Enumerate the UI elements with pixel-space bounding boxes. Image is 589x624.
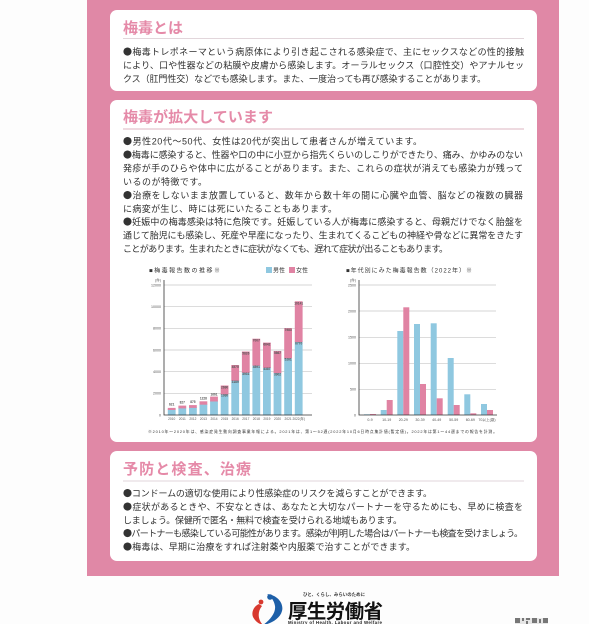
text block: spreading details: 発疹が手のひらや体中に広がることがあります。また、これらの症状が消えても感染力が残って [123,162,523,174]
x axis labels: 2018 [253,417,260,421]
text block: definition: により、口や性器などの粘膜や皮膚から感染します。オーラルセックス（口腔性交）やアナルセッ [123,60,524,70]
icon: QR code [515,618,548,624]
axes [164,280,312,415]
y axis labels: 2000 [153,392,161,396]
y axis labels: 2500 [348,283,356,287]
value labels: 875 [190,400,196,404]
legend: male and female: 女性 [296,266,308,274]
pink background panel [87,0,559,576]
text block: spreading details: ことがあります。生まれたときに症状がなくても、遅れて症状が出ることもあります。 [123,243,448,254]
x axis labels: 2017 [242,417,250,421]
heading: prevention, testing and treatment: 予防と検査、治療 [123,460,251,478]
chart title: by age: ■年代別にみた梅毒報告数（2022年）※ [346,266,472,274]
chart title: trend: ■梅毒報告数の推移※ [149,266,220,274]
logo: Ministry of Health, Labour and Welfare [252,591,383,624]
y axis labels: 8000 [153,327,161,331]
value labels: 4591 [253,365,260,369]
text block: spreading details: に病変が生じ、時には死にいたることもあります。 [123,203,337,214]
y axis labels: 10000 [151,305,161,309]
x axis labels: 2020 [274,417,281,421]
value labels: 6770 [295,341,302,345]
x axis labels: 30-39 [415,418,425,422]
text block: prevention advice: ●コンドームの適切な使用により性感染症のリスクを減らすことができます。 [123,486,432,500]
value labels: 4387 [263,367,271,371]
y axis labels: 1000 [348,362,356,366]
text block: prevention advice: ●パートナーも感染している可能性があります。感染が判明した場合はパートナーも検査を受けましょう。 [123,526,523,540]
x axis labels: 2021 [285,417,292,421]
heading: what is syphilis: 梅毒とは [123,19,183,37]
x axis labels: 2014 [210,417,218,421]
x axis labels: 60-69 [466,418,475,422]
value labels: 3931 [242,372,250,376]
text block: definition: ●梅毒トレポネーマという病原体により引き起こされる感染症で、主にセックスなどの性的接触 [123,45,524,58]
text block: spreading details [123,134,523,254]
male bars [364,323,487,415]
y axis labels: 6000 [153,348,161,352]
icon: ministry emblem [252,594,282,624]
value labels: 4575 [232,365,239,369]
x axis labels: 2015 [221,417,228,421]
value labels: 5867 [274,351,281,355]
text block: definition: クス（肛門性交）などでも感染します。また、一度治っても再び感染することがあります。 [123,73,486,84]
text block: prevention advice: ●梅毒は、早期に治療をすれば注射薬や内服薬で治すことができます。 [123,540,415,553]
text block: spreading details: ●男性20代～50代、女性は20代が突出して患者さんが増えています。 [123,134,422,148]
value labels: 7007 [253,339,260,343]
text block: spreading details: ●梅毒に感染すると、性器や口の中に小豆から指先くらいのしこりができたり、痛み、かゆみのない [123,148,523,161]
value labels: 2690 [221,386,228,390]
panel: syphilis is spreading [110,100,537,442]
bar chart: reported cases by year [149,266,312,421]
y axis labels: 1500 [348,336,356,340]
axes [359,280,497,415]
x axis labels: 2016 [232,417,239,421]
y axis labels: (件) [350,278,356,282]
female bars [168,302,302,410]
value labels: 6642 [263,343,271,347]
text block: prevention advice: しましょう。保健所で匿名・無料で検査を受けられる地域もあります。 [123,514,402,526]
value labels: 827 [180,400,185,404]
value labels: 1228 [200,396,207,400]
value labels: 621 [169,402,175,406]
x axis labels: 40-49 [432,418,441,422]
panel: what is syphilis [110,10,537,91]
y axis labels: 0 [159,413,161,417]
text block: spreading details: 通じて胎児にも感染し、死産や早産になったり、生まれてくるこどもの神経や骨などに異常をきたす [123,230,523,240]
x axis labels: 2019 [263,417,271,421]
text block: prevention advice: ●症状があるときや、不安なときは、あなたと大切なパートナーを守るためにも、早めに検査を [123,500,523,513]
y axis labels: 4000 [153,370,161,374]
y axis labels: (件) [155,278,161,282]
legend: male and female [266,266,308,274]
x axis labels [168,416,305,421]
x axis labels [367,417,496,422]
value labels: 5261 [285,358,292,362]
text block: definition [123,45,524,84]
x axis labels: 50-59 [449,418,458,422]
x axis labels: 2010 [168,417,175,421]
value labels: 3902 [274,372,281,376]
y axis labels: 2000 [348,309,356,313]
value labels: 5826 [242,352,250,356]
y axis labels [348,278,356,417]
logo tagline: ひと、くらし、みらいのために [303,591,365,598]
male bars [168,342,302,415]
y axis labels: 500 [350,388,356,392]
x axis labels: 10-19 [382,418,391,422]
value labels: 1661 [210,392,218,396]
y axis labels [151,278,161,417]
value labels [169,301,303,406]
panel: prevention, testing and treatment [110,451,537,561]
text block: spreading details: ●治療をしないまま放置していると、数年から数十年の間に心臓や血管、脳などの複数の臓器 [123,188,523,202]
value labels: 10141 [294,301,303,305]
x axis labels: 0-9 [367,418,373,422]
x axis labels: 2022(年) [292,416,305,421]
text block: spreading details: いるのが特徴です。 [123,176,207,187]
text block: spreading details: ●妊娠中の梅毒感染は特に危険です。妊娠している人が梅毒に感染すると、母親だけでなく胎盤を [123,215,523,228]
value labels: 7983 [285,328,292,332]
value labels: 3189 [232,380,239,384]
legend: male and female: 男性 [273,266,285,274]
female bars [370,307,493,415]
x axis labels: 2012 [189,417,197,421]
x axis labels: 20-29 [399,418,408,422]
bar chart: reported cases by age 2022 [346,266,497,422]
logo name: 厚生労働省 [288,601,383,623]
x axis labels: 2011 [179,417,186,421]
y axis labels: 0 [354,413,356,417]
x axis labels: 2013 [200,417,207,421]
footnote: ※2010年～2020年は、感染症発生動向調査事業年報による。2021年は、第1～52週(2022年10月6日時点集計値(暫定値)。2022年は第1～44週までの報告を計測。 [148,429,497,434]
heading: syphilis is spreading: 梅毒が拡大しています [123,108,273,126]
text block: prevention advice [123,486,523,553]
value labels: 1930 [221,394,228,398]
x axis labels: 70以上(歳) [478,417,496,422]
y axis labels: 12000 [151,283,161,287]
